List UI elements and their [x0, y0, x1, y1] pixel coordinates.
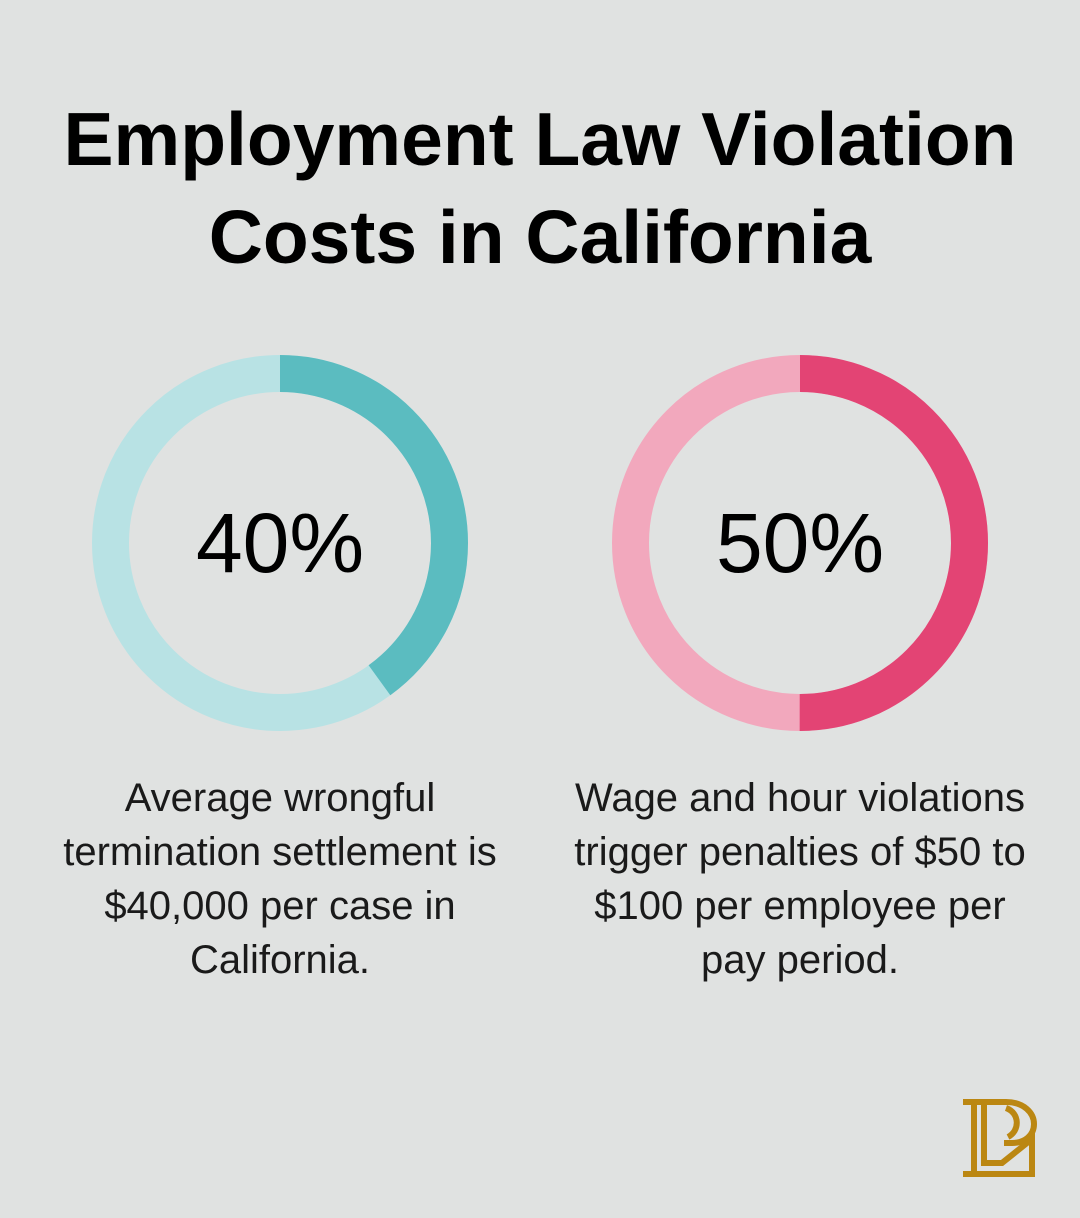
title: Costs in California — [209, 195, 871, 279]
text: wrongful termination description: Average wrongful termination settlement is $40,000 per case in California. — [63, 776, 497, 982]
value 50%: 50% — [716, 496, 884, 590]
donut chart 50% — [612, 355, 988, 731]
panel: wrongful termination — [92, 355, 468, 731]
icon: logo — [963, 1099, 1037, 1177]
value 40%: 40% — [196, 496, 364, 590]
panel: wage and hour — [612, 355, 988, 731]
donut chart 40% — [92, 355, 468, 731]
title: Employment Law Violation — [64, 97, 1016, 181]
text: wage and hour description: Wage and hour violations trigger penalties of $50 to $100 per employee per pay period. — [574, 776, 1026, 982]
title — [64, 97, 1016, 279]
